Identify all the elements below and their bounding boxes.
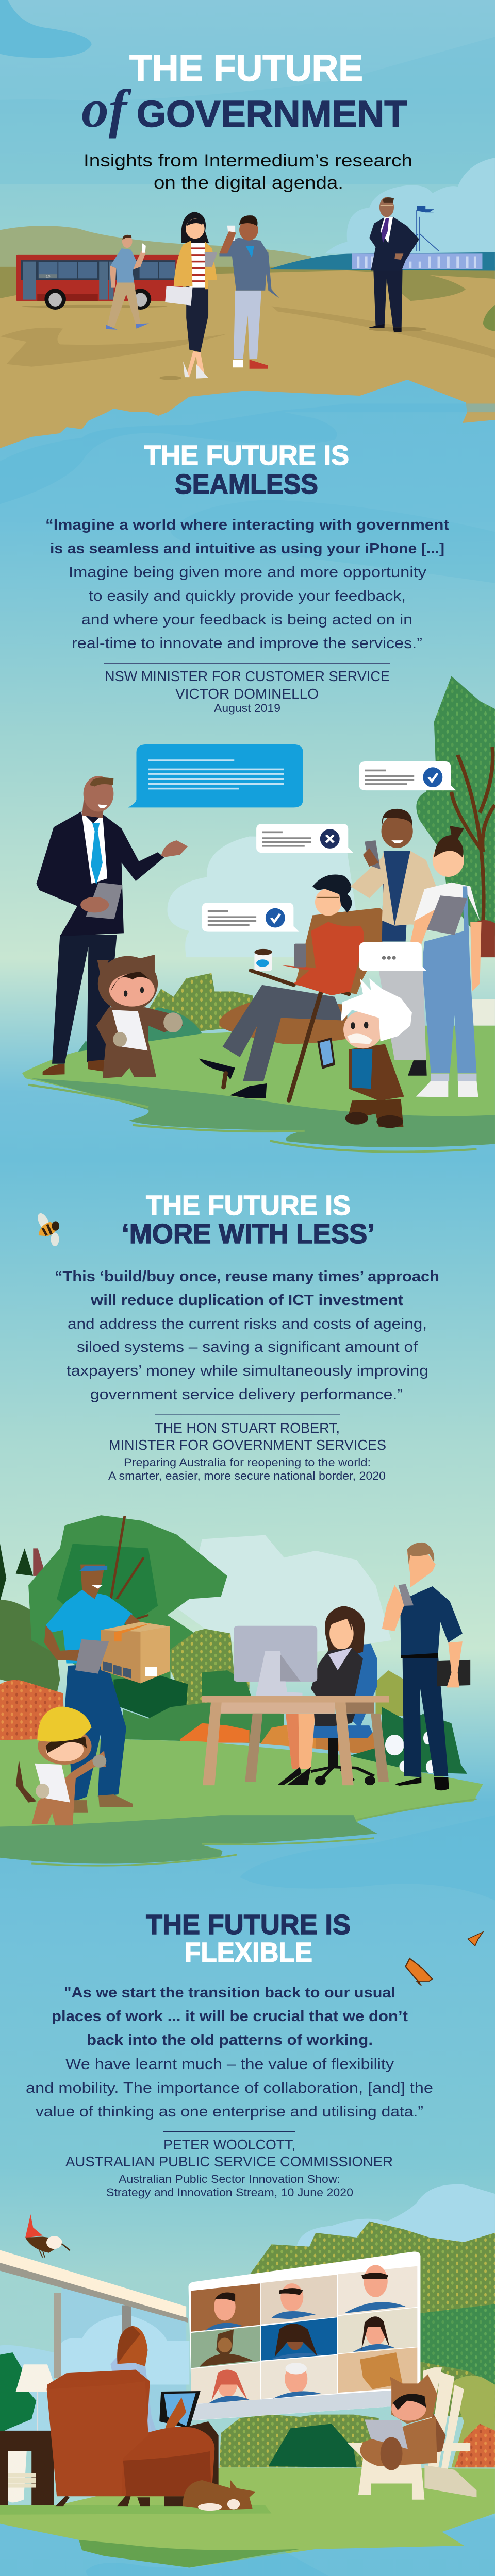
quote: stuart robert: and address the current risks and costs of ageing, — [68, 1316, 427, 1332]
quote: stuart robert: will reduce duplication of ICT investment — [90, 1292, 403, 1309]
water patches — [0, 403, 495, 583]
attribution: minister for customer service: NSW MINISTER FOR CUSTOMER SERVICE — [105, 668, 390, 684]
title: the future: THE FUTURE — [129, 48, 363, 89]
heading: the future is flexible: FLEXIBLE — [185, 1937, 312, 1968]
quote: peter woolcott: "As we start the transition back to our usual — [64, 1985, 395, 2001]
title: of: of — [81, 78, 131, 139]
lawn — [0, 2467, 495, 2567]
quote: victor dominello: real-time to innovate and improve the services.” — [72, 635, 422, 652]
figure: office desk, monitor and woman — [202, 1606, 389, 1785]
quote: peter woolcott: places of work ... it will be crucial that we don’t — [52, 2008, 408, 2025]
icon: red bus — [16, 255, 183, 310]
panel: hero — [0, 0, 495, 448]
attribution: minister for customer service — [105, 668, 390, 715]
ground: tan field — [0, 270, 495, 448]
cloud and trees — [219, 2184, 495, 2467]
figure: man on phone with folder — [382, 1543, 470, 1790]
heading: the future is flexible: THE FUTURE IS — [146, 1909, 351, 1940]
speech bubble: typing — [359, 942, 427, 971]
figure: woman in armchair with mug — [199, 874, 386, 1100]
hero illustration — [0, 0, 495, 298]
flowers — [385, 1732, 436, 1773]
heading: the future is flexible — [146, 1909, 351, 1968]
quote: stuart robert: taxpayers’ money while simultaneously improving — [67, 1363, 428, 1379]
figure: astro with hard hat and tablet — [16, 1706, 106, 1825]
icon: butterflies — [406, 1932, 483, 1986]
figure: young man with phone — [219, 215, 279, 369]
attribution: stuart robert: THE HON STUART ROBERT, — [155, 1420, 340, 1436]
illustration: citizens and minister on island — [22, 676, 495, 1152]
glass wall and window — [0, 2250, 189, 2435]
attribution: stuart robert — [108, 1420, 386, 1482]
quote: victor dominello: to easily and quickly provide your feedback, — [89, 588, 406, 604]
speech bubble: checked — [359, 761, 456, 790]
quote: victor dominello: Imagine being given more and more opportunity — [69, 564, 427, 581]
attribution: peter woolcott: Australian Public Sector Innovation Show: — [119, 2173, 340, 2185]
quote: stuart robert: government service delivery performance.” — [90, 1386, 403, 1403]
quote: peter woolcott: and mobility. The importance of collaboration, [and] the — [26, 2080, 433, 2096]
subtitle: on the digital agenda. — [154, 173, 343, 193]
figure: minister in pinstripe suit — [369, 197, 427, 332]
attribution: peter woolcott: Strategy and Innovation Stream, 10 June 2020 — [106, 2186, 353, 2199]
figure: walking man with phone — [106, 235, 149, 330]
cloud — [177, 1535, 391, 1652]
cloud — [167, 836, 363, 957]
quote: peter woolcott — [26, 1985, 433, 2120]
figure: woman with cardigan — [159, 212, 217, 380]
attribution: peter woolcott: PETER WOOLCOTT, — [163, 2137, 295, 2153]
icon: bird on roof — [25, 2214, 70, 2258]
attribution: stuart robert: MINISTER FOR GOVERNMENT SERVICES — [109, 1437, 386, 1453]
island — [22, 1026, 495, 1147]
figure: man in suit with tablet — [36, 776, 188, 1075]
attribution: minister for customer service: VICTOR DOMINELLO — [175, 686, 319, 702]
subtitle: Insights from Intermedium’s research — [84, 151, 412, 171]
icon: red bus: 10 — [46, 274, 51, 278]
illustration: video call from home — [0, 2184, 495, 2576]
quote: victor dominello: is as seamless and intuitive as using your iPhone [...] — [50, 540, 444, 557]
background trees and bushes — [0, 1515, 467, 1774]
illustration: delivery worker and office on island — [0, 1515, 495, 1900]
quote: victor dominello: “Imagine a world where interacting with government — [45, 517, 449, 533]
figure: plant, lamp and side table — [0, 2352, 57, 2505]
quote: stuart robert: “This ‘build/buy once, reuse many times’ approach — [55, 1268, 439, 1285]
figure: astro on adirondack chair with laptop — [347, 2367, 476, 2500]
heading: the future is seamless: THE FUTURE IS — [144, 440, 349, 471]
panel: seamless — [0, 403, 495, 1152]
figure: delivery man with box — [44, 1565, 170, 1813]
heading: the future is more with less: ‘MORE WITH LESS’ — [122, 1218, 375, 1249]
quote: stuart robert: siloed systems – saving a significant amount of — [77, 1339, 418, 1355]
figure: man in beige jacket — [351, 809, 437, 1076]
attribution: stuart robert: Preparing Australia for reopening to the world: — [124, 1456, 371, 1469]
quote: stuart robert — [55, 1268, 439, 1403]
figure: sleeping cat — [183, 2480, 256, 2511]
subtitle — [84, 151, 412, 193]
speech bubble: rejected — [256, 824, 354, 853]
speech bubble: blue — [128, 744, 303, 807]
figure: astro in bear suit — [96, 955, 183, 1078]
panel: flexible — [0, 1909, 495, 2576]
island — [0, 1738, 483, 1864]
title: government: GOVERNMENT — [137, 94, 407, 135]
speech bubble: approved — [202, 903, 299, 932]
attribution: stuart robert: A smarter, easier, more secure national border, 2020 — [108, 1469, 386, 1482]
attribution: peter woolcott — [65, 2137, 393, 2199]
figure: man in armchair with tablet — [47, 2326, 219, 2506]
attribution: minister for customer service: August 2019 — [214, 702, 280, 715]
water patch — [86, 2551, 423, 2576]
tree with leaves — [416, 676, 495, 957]
panel: more with less — [0, 1190, 495, 1900]
quote: victor dominello: and where your feedback is being acted on in — [81, 612, 412, 628]
heading: the future is more with less — [122, 1190, 375, 1249]
heading: the future is seamless — [144, 440, 349, 500]
video call screen — [188, 2251, 420, 2420]
quote: peter woolcott: value of thinking as one enterprise and utilising data.” — [36, 2104, 423, 2120]
water patch — [240, 1815, 495, 1900]
icon: parliament house — [352, 206, 482, 269]
bushes — [148, 973, 256, 1036]
quote: victor dominello — [45, 517, 449, 652]
quote: peter woolcott: back into the old patterns of working. — [87, 2032, 373, 2048]
figure: woman in denim overalls — [410, 826, 482, 1097]
attribution: peter woolcott: AUSTRALIAN PUBLIC SERVICE COMMISSIONER — [65, 2154, 393, 2170]
quote: peter woolcott: We have learnt much – the value of flexibility — [65, 2056, 394, 2073]
heading: the future is more with less: THE FUTURE IS — [146, 1190, 351, 1221]
icon: bee — [36, 1212, 59, 1246]
heading: the future is seamless: SEAMLESS — [175, 469, 318, 500]
figure: einstein astro with phone — [317, 978, 412, 1128]
